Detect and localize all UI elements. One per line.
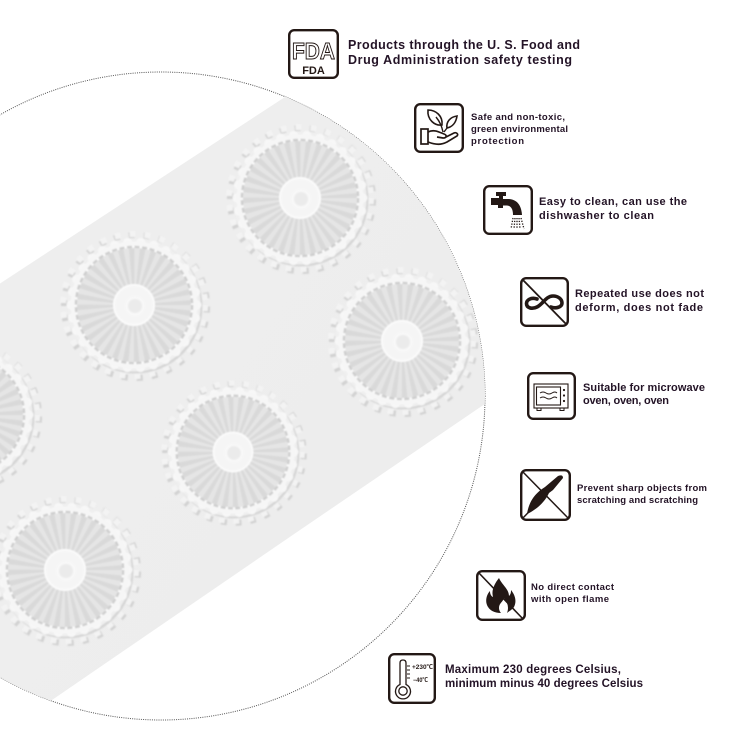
icon: thermometer bbox=[389, 654, 435, 703]
feature: temperature range bbox=[389, 654, 643, 703]
feature: safe and non-toxic bbox=[415, 104, 568, 152]
icon: plant in hand bbox=[415, 104, 463, 152]
text: repeated use: Repeated use does not bbox=[575, 288, 704, 300]
text: sharp objects: scratching and scratching bbox=[577, 495, 698, 506]
product photo: silicone mold inside dotted circle bbox=[0, 0, 520, 742]
cavity: top right bbox=[229, 127, 373, 271]
cavity: lower left bbox=[0, 499, 138, 643]
text: safe and non-toxic: green environmental bbox=[471, 124, 568, 135]
text: FDA testing: Products through the U. S. Food and bbox=[348, 38, 580, 52]
feature: repeated use bbox=[521, 278, 704, 326]
icon: crossed knife bbox=[521, 470, 570, 520]
rosette cavities bbox=[0, 127, 475, 643]
icon: crossed flame bbox=[477, 571, 525, 620]
text: safe and non-toxic: Safe and non-toxic, bbox=[471, 112, 565, 123]
text: open flame: No direct contact bbox=[531, 582, 615, 593]
cavity: centre bbox=[164, 383, 304, 523]
icon: FDA bbox=[289, 30, 338, 78]
feature: FDA bbox=[289, 30, 580, 78]
feature: sharp objects bbox=[521, 470, 707, 520]
text: easy to clean: dishwasher to clean bbox=[539, 210, 654, 222]
text: microwave: oven, oven, oven bbox=[583, 395, 669, 407]
text: open flame: with open flame bbox=[530, 594, 609, 605]
icon: thermometer: +230℃ bbox=[412, 664, 433, 671]
text: microwave: Suitable for microwave bbox=[583, 382, 705, 394]
feature: open flame bbox=[477, 571, 615, 620]
cavity: far left bbox=[0, 344, 39, 488]
cavity: upper left bbox=[63, 234, 207, 378]
icon: crossed infinity bbox=[521, 278, 568, 326]
cavity: right bbox=[331, 270, 475, 414]
text: FDA testing: Drug Administration safety testing bbox=[348, 53, 572, 67]
text: repeated use: deform, does not fade bbox=[575, 302, 703, 314]
text: temperature range: Maximum 230 degrees Celsius, bbox=[445, 664, 621, 676]
icon: FDA: FDA bbox=[302, 65, 325, 77]
dotted circle outline bbox=[0, 72, 485, 720]
icon: thermometer: −40℃ bbox=[413, 677, 428, 684]
text: sharp objects: Prevent sharp objects from bbox=[577, 483, 707, 494]
feature: microwave bbox=[528, 373, 705, 419]
silicone mold sheet bbox=[0, 96, 564, 701]
text: safe and non-toxic: protection bbox=[471, 136, 524, 147]
icon: FDA: FDA bbox=[292, 38, 335, 64]
text: easy to clean: Easy to clean, can use the bbox=[539, 196, 687, 208]
icon: faucet bbox=[484, 186, 532, 234]
mold sheet background bbox=[0, 96, 485, 701]
text: temperature range: minimum minus 40 degrees Celsius bbox=[445, 678, 643, 690]
feature: easy to clean bbox=[484, 186, 687, 234]
icon: microwave bbox=[528, 373, 575, 419]
